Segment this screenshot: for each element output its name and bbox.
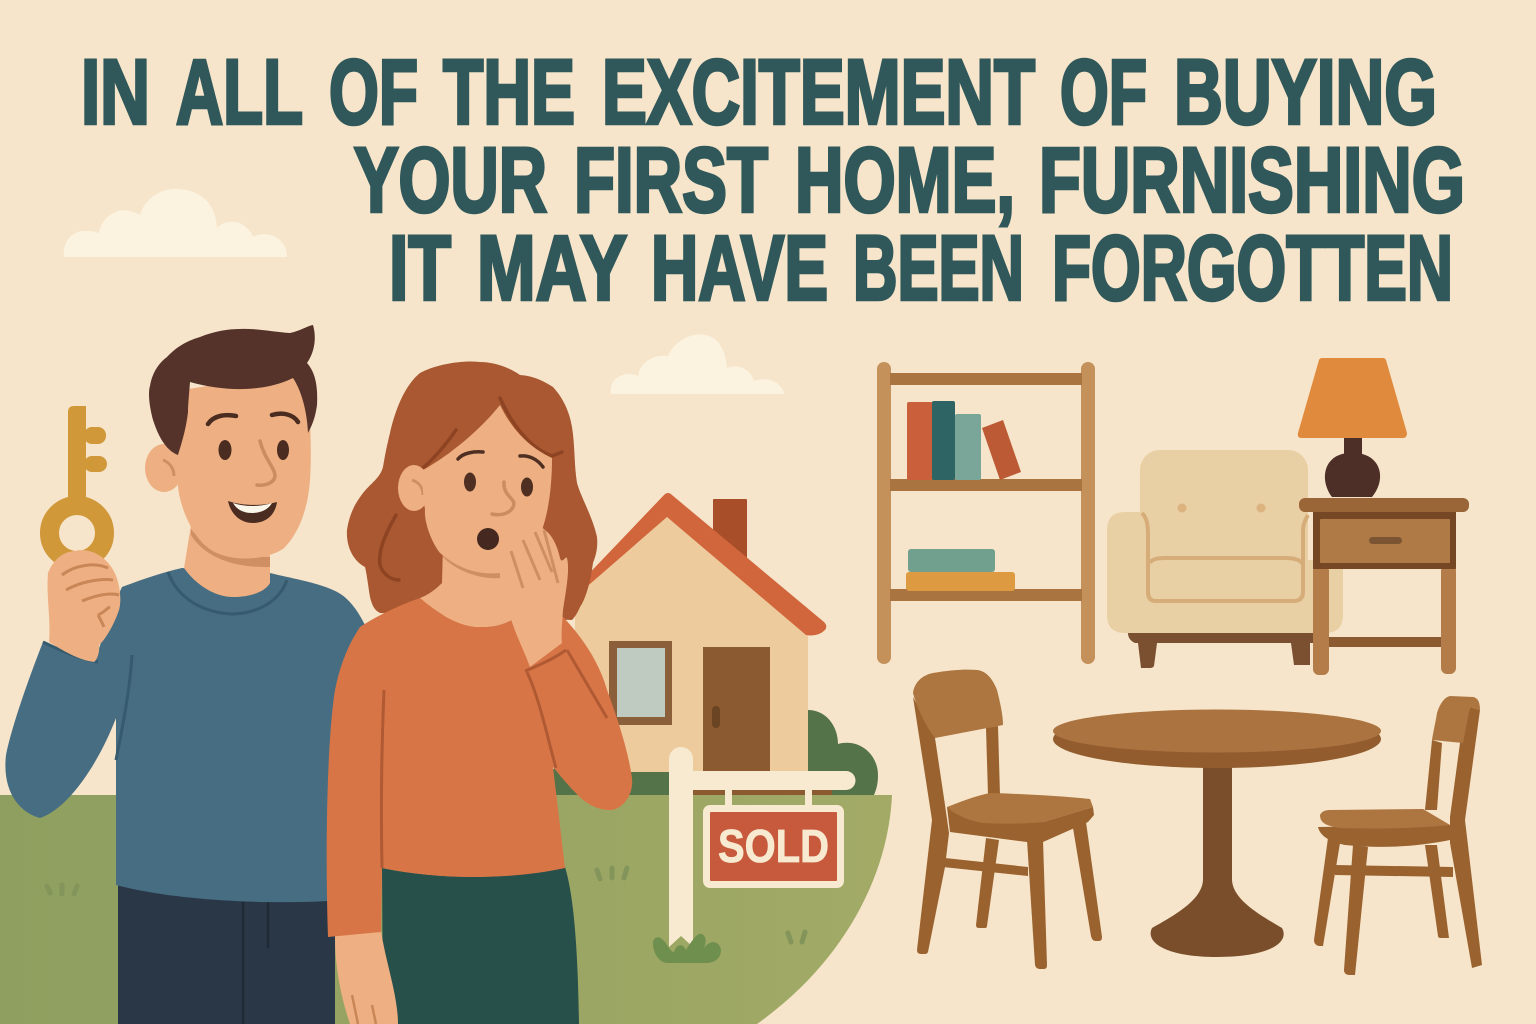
bushes xyxy=(550,710,878,795)
man hand xyxy=(48,550,120,662)
woman nose and mouth xyxy=(492,482,514,515)
man hair xyxy=(149,325,317,455)
woman ear xyxy=(398,465,430,511)
key xyxy=(50,406,107,560)
sign post xyxy=(669,747,856,947)
chair arms and base xyxy=(1107,512,1343,633)
chair seat xyxy=(947,793,1093,824)
title: EXCITEMENT xyxy=(602,42,1035,144)
title: ALL xyxy=(176,42,303,144)
title: YOUR xyxy=(354,130,547,232)
chair frame xyxy=(1314,707,1482,975)
title: HOME, xyxy=(795,130,1015,232)
man nose and mouth xyxy=(257,441,275,485)
window xyxy=(609,641,672,725)
table top xyxy=(1053,710,1381,752)
dining table xyxy=(1053,710,1381,957)
woman hair back xyxy=(347,362,597,620)
woman sweater xyxy=(327,598,632,937)
man trousers xyxy=(118,880,335,1024)
woman eyes xyxy=(464,472,476,492)
woman trousers xyxy=(382,867,579,1024)
chair back panel xyxy=(913,670,1003,738)
sold sign xyxy=(653,747,856,963)
books upper xyxy=(907,402,933,480)
man head xyxy=(176,370,311,559)
man sweater xyxy=(5,568,365,902)
title: OF xyxy=(329,42,418,144)
grass at base xyxy=(653,934,721,963)
chimney xyxy=(713,499,747,569)
woman neck xyxy=(420,545,515,627)
chair back xyxy=(1140,450,1308,590)
man neck xyxy=(184,525,270,597)
title: BUYING xyxy=(1174,42,1437,144)
man eyes xyxy=(218,440,232,460)
cloud left xyxy=(64,189,287,257)
table pedestal xyxy=(1151,760,1284,957)
title: BEEN xyxy=(853,218,1024,320)
chair legs and rail xyxy=(1128,633,1313,668)
chair seat xyxy=(1320,809,1450,829)
man ear xyxy=(145,444,183,492)
title: IN xyxy=(81,42,150,144)
cloud middle xyxy=(611,334,784,394)
lawn xyxy=(0,795,892,1024)
books lower xyxy=(908,549,995,572)
roof xyxy=(580,493,826,635)
chair frame xyxy=(913,697,1102,969)
title: HAVE xyxy=(651,218,828,320)
sold sign: SOLD xyxy=(718,820,829,872)
grass tufts xyxy=(47,868,805,942)
left dining chair xyxy=(913,670,1102,969)
title: THE xyxy=(443,42,575,144)
title xyxy=(81,42,1465,320)
seat cushion lines xyxy=(1142,513,1308,601)
side table xyxy=(1299,498,1469,675)
house xyxy=(575,493,832,795)
sign board xyxy=(703,805,844,888)
shelf frame xyxy=(877,362,891,664)
woman left hand xyxy=(335,930,398,1024)
table rim xyxy=(1053,710,1381,768)
door xyxy=(703,647,770,771)
right dining chair xyxy=(1314,696,1482,975)
title: FIRST xyxy=(574,130,768,232)
woman head xyxy=(423,405,552,573)
man xyxy=(5,325,365,1024)
title: MAY xyxy=(477,218,627,320)
woman raised hand xyxy=(497,522,568,667)
chair back panel xyxy=(1432,696,1480,743)
title: IT xyxy=(389,218,451,320)
woman xyxy=(327,362,632,1024)
bookshelf xyxy=(877,362,1095,664)
house wall xyxy=(575,517,808,772)
armchair xyxy=(1107,450,1343,668)
title: OF xyxy=(1060,42,1147,144)
lamp xyxy=(1298,358,1407,497)
